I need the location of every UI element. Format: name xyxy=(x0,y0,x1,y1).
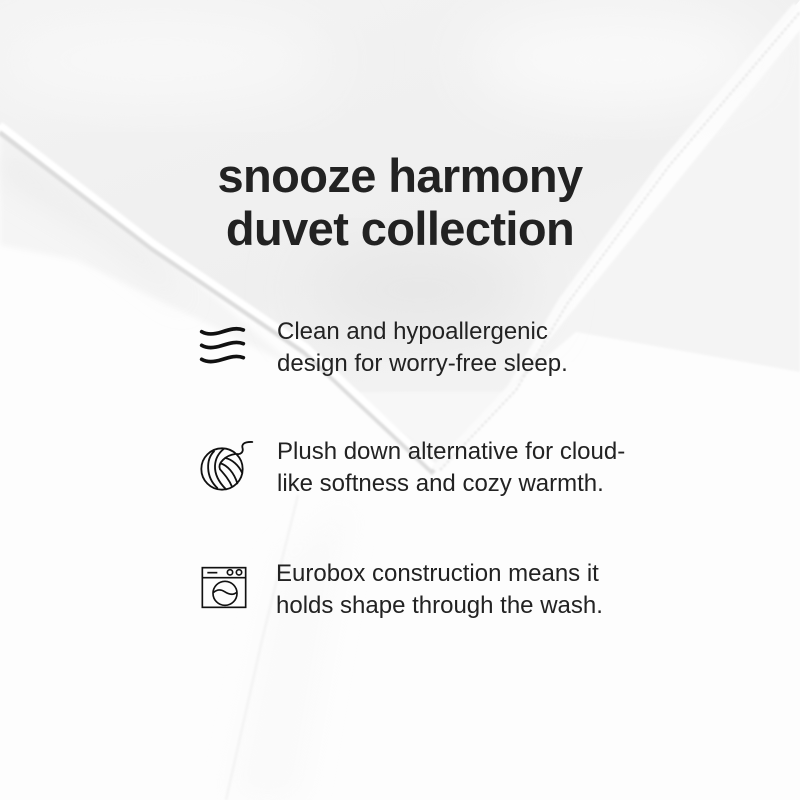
lower flap tip xyxy=(352,392,505,462)
text: plush down alternative: Plush down alternative for cloud- xyxy=(277,438,625,465)
icon: waves xyxy=(200,326,246,364)
text: eurobox construction: Eurobox construction means it xyxy=(276,560,599,587)
icon: yarn ball xyxy=(200,441,254,491)
icon: washing machine xyxy=(202,566,246,608)
right grey panel xyxy=(510,30,800,388)
flap xyxy=(0,0,800,469)
text: eurobox construction: holds shape through the wash. xyxy=(276,592,603,619)
text: plush down alternative: like softness and cozy warmth. xyxy=(277,470,604,497)
title: snooze harmony xyxy=(217,149,583,202)
text: clean and hypoallergenic xyxy=(277,318,568,377)
text: eurobox construction xyxy=(276,560,603,619)
flap shadows xyxy=(0,15,330,105)
title: duvet collection xyxy=(226,202,574,255)
text: clean and hypoallergenic: Clean and hypoallergenic xyxy=(277,318,548,345)
piping seam xyxy=(0,132,434,473)
text: clean and hypoallergenic: design for worry-free sleep. xyxy=(277,350,568,377)
text: plush down alternative xyxy=(277,438,625,497)
title xyxy=(217,149,583,255)
left mid band under the flap xyxy=(0,130,300,370)
